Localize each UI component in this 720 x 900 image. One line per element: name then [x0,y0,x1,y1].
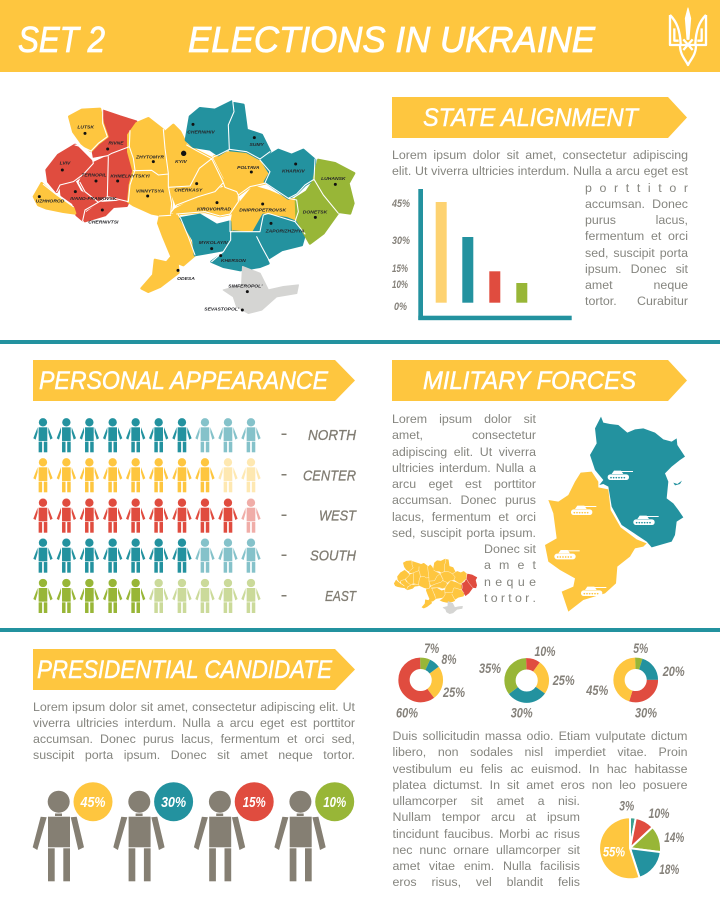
text block: intro: Lorem ipsum dolor sit amet, consectetur adipiscing [392,148,688,162]
donut chart 1 [396,640,465,720]
donut chart 1: 8% [442,651,457,667]
bar chart [391,189,572,320]
text block: military side: t o r t o r . [484,591,536,605]
map region: Crimea [223,267,298,313]
donut chart 2: 25% [552,672,575,688]
donut chart 3 [586,640,685,720]
text block: military main: adipiscing elit. Ut viverra [392,444,536,458]
donut chart 2: 35% [479,660,501,676]
banner: state alignment [392,97,687,138]
text block: results side: ullamcorper sit amet a nisi. [392,794,580,808]
city names: IVANO-FRANKIVSK [70,196,117,202]
donut chart 3: 45% [586,682,609,698]
pie chart: 55% [603,844,625,860]
text block: candidate: accumsan. Donec purus lacus, fermentum et orci sed, [33,732,355,746]
region labels: SOUTH [310,548,356,564]
candidate 1: 45% [33,782,113,881]
candidate 3: 15%: 15% [243,794,266,811]
text block: side column: accumsan. Donec [585,197,688,211]
pictogram row: east [33,579,261,613]
pictogram row: north [33,418,261,452]
bar chart: 10% [392,279,408,291]
text block: intro [392,147,688,180]
city names: KHARKIV [282,169,305,175]
pictogram row: center [33,458,261,492]
map regions: center [34,109,298,292]
text block: results side: nec nunc ornare ullamcorper sit [392,843,580,857]
city names: LUHANSK [321,176,346,182]
text block: results main: vestibulum eu felis ac euismod. In hac habitasse [392,762,688,776]
banner: presidential candidate: PRESIDENTIAL CANDIDATE [37,656,332,684]
city names: SIMFEROPOL' [228,283,263,289]
text block: military main: Lorem ipsum dolor sit [392,412,536,426]
title: ELECTIONS IN UKRAINE [188,19,596,60]
city names: ZHYTOMYR [135,154,164,160]
banner: presidential candidate [33,649,355,690]
city names: KHMELNYTSKYI [110,173,150,179]
banner: state alignment: STATE ALIGNMENT [423,104,640,132]
donut chart 1: 7% [424,640,440,656]
region: Donetsk [545,472,647,612]
pie chart: 14% [664,829,685,845]
city names: DNIPROPETROVSK [239,208,286,214]
candidate 4: 10% [274,782,354,881]
set label: SET 2 [18,19,105,60]
donut chart 3: 20% [662,663,685,679]
candidate 4: 10%: 10% [323,794,346,811]
text block: results main: Duis sollicitudin massa odio. Etiam vulputate dictum [392,729,688,743]
text block: results side [392,793,580,892]
icon: tanks [554,471,659,596]
city names: CHERNIHIV [187,129,215,135]
donut chart 2: 30% [511,704,533,720]
region labels: WEST [319,508,358,524]
map: Donbas regions with tanks [545,417,685,612]
text block: side column: purus lacus, [585,213,688,227]
text block: military main: accumsan. Donec purus [392,493,536,507]
donut chart 1: 60% [396,704,418,720]
panel: personal appearance [33,360,358,613]
text block: military main: amet, consectetur [392,428,536,442]
region labels [282,427,358,605]
text block: side column: amet neque [585,278,688,292]
candidate 2: 30% [113,782,193,881]
pie chart: 3% [619,798,635,814]
bar chart: 15% [392,263,408,275]
city names: ZAPORIZHZHYA [265,229,305,235]
text block: military main: arcu eget est porttitor [392,477,536,491]
city names: CHERNIVTSI [88,219,119,225]
map regions: east [296,160,354,243]
candidate 1: 45%: 45% [80,794,106,811]
banner: personal appearance: PERSONAL APPEARANCE [39,367,328,395]
banner: military forces [392,360,687,401]
text block: candidate: suscipit porta ipsum. Donec sit amet neque tortor. [33,748,355,762]
city names: VINNYTSYA [136,188,164,194]
city names: ODESA [177,276,195,282]
panel: results charts [392,640,688,892]
city names: SEVASTOPOL' [204,307,240,313]
donut chart 1: 25% [442,684,465,700]
text block: side column: ipsum. Donec sit [585,262,688,276]
text block: results main [392,728,688,794]
icon: Ukrainian trident [670,8,706,65]
text block: intro: elit. Ut viverra ultricies interdum. Nulla a arcu eget est [392,164,688,178]
text block: results side: amet vitae enim. Nulla facilisis [392,859,580,873]
donut chart 3: 30% [635,704,657,720]
candidate 3: 15% [194,782,274,881]
text block: candidate: viverra ultricies interdum. Nulla a arcu eget est porttitor [33,716,355,730]
city names: DONETSK [303,209,328,215]
text block: military main: ultricies interdum. Nulla a [392,461,536,475]
bar chart: 45% [391,198,410,210]
text block: side column: sed, suscipit porta [585,246,688,260]
text block: side column: tortor. Curabitur [585,294,688,308]
bar chart: 30% [392,235,410,247]
text block: results main: libero, non sodales nisl imperdiet vitae. Proin [392,745,688,759]
divider [0,340,720,344]
text block: results main: platea dictumst. In sit amet eros non leo posuere [392,778,688,792]
city names: CHERKASY [174,188,203,194]
text block: military side [484,541,536,607]
bar chart: 0% [394,301,407,313]
panel: state alignment [391,97,688,320]
region: Luhansk [590,417,685,547]
mini map of Ukraine [394,559,477,614]
pictogram row: west [33,499,261,533]
city names: SUMY [249,142,265,148]
text block: results side: Nullam tempor arcu at ipsum [392,810,580,824]
donut chart 2 [479,643,575,720]
region labels: EAST [325,588,357,605]
header band [0,0,720,72]
text block: military main: lacus, fermentum et orci [392,510,536,524]
divider [0,628,720,632]
panel: presidential candidate [33,649,355,881]
city names: KIROVOHRAD [197,207,231,213]
region labels: NORTH [308,427,356,444]
panel: state alignment map [34,101,354,313]
city names: POLTAVA [237,165,260,171]
pictogram row: south [33,539,261,573]
city dots [38,123,337,311]
map regions: north and south [181,102,315,270]
panel: military forces [392,360,687,614]
candidate 2: 30%: 30% [161,794,186,811]
text block: side column: fermentum et orci [585,229,688,243]
city names: LUTSK [77,124,94,130]
pie chart: 10% [648,805,670,821]
city names [36,124,346,313]
region labels: CENTER [303,468,356,484]
donut chart 3: 5% [633,640,649,656]
city names: LVIV [60,160,71,166]
text block: side column [585,180,688,310]
text block: military side: Donec sit [484,542,536,556]
pie chart: 18% [659,861,680,877]
banner: personal appearance [33,360,355,401]
text block: candidate [33,698,355,764]
pie chart [599,798,685,879]
city names: UZHHOROD [36,198,65,204]
banner: military forces: MILITARY FORCES [423,367,636,395]
text block: side column: p o r t t i t o r [585,180,688,194]
city names: KYIV [175,159,187,165]
donut chart 2: 10% [534,643,556,659]
region borders [43,101,338,262]
city names: MYKOLAYIV [199,240,229,246]
text block: military side: n e q u e [484,574,536,588]
map regions: west [47,111,136,221]
text block: military main: sed, suscipit porta ipsum. [392,526,536,540]
city names: TERNOPIL [81,173,107,179]
text block: military side: a m e t [484,558,536,572]
text block: results side: eros risus, vel blandit felis [392,875,580,889]
city names: KHERSON [221,258,246,264]
text block: results side: tincidunt faucibus. Morbi ac risus [392,826,580,840]
text block: military main [392,411,536,543]
city names: RIVNE [108,140,124,146]
text block: candidate: Lorem ipsum dolor sit amet, consectetur adipiscing elit. Ut [33,700,355,714]
